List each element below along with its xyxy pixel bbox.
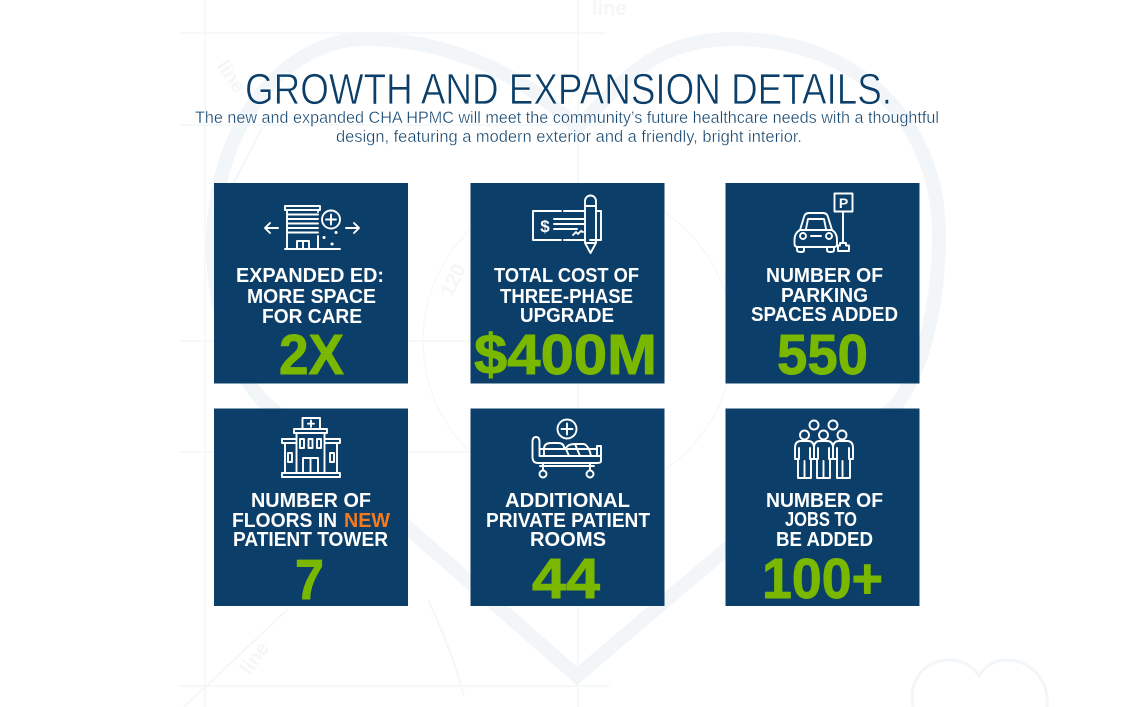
label: PATIENT TOWER [233, 528, 388, 551]
label: ADDITIONAL [505, 489, 630, 512]
icon: patient bed [532, 420, 601, 478]
label: EXPANDED ED: [236, 264, 384, 287]
label: MORE SPACE [247, 285, 376, 308]
subtitle: design, featuring a modern exterior and a friendly, bright interior. [336, 127, 802, 146]
panel: expanded ED [214, 183, 408, 387]
label: UPGRADE [520, 304, 614, 327]
value: 44 [532, 547, 600, 611]
panel: private patient rooms [470, 408, 664, 611]
value: $400M [474, 323, 657, 387]
label: ROOMS [530, 528, 606, 551]
panel: parking spaces [726, 183, 920, 387]
subtitle: The new and expanded CHA HPMC will meet the community’s future healthcare needs with a thoughtful [195, 108, 939, 127]
value: 7 [295, 548, 324, 612]
panel: jobs to be added [726, 408, 920, 611]
label: JOBS TO [785, 508, 857, 531]
label: NUMBER OF [766, 489, 883, 512]
label: SPACES ADDED [751, 303, 898, 326]
label [486, 489, 650, 551]
label [232, 489, 391, 551]
icon: check and pen: $ [540, 217, 550, 236]
subtitle [195, 108, 939, 146]
icon: expanded building [265, 206, 359, 249]
background watermark: heart and drafting lines: line [236, 638, 274, 679]
label: NUMBER OF [251, 489, 371, 512]
label: FOR CARE [262, 305, 362, 328]
label: NEW [344, 509, 391, 532]
background watermark: heart and drafting lines: 120 [437, 261, 471, 300]
label [766, 489, 883, 551]
icon: car and parking sign [794, 194, 852, 252]
label: PRIVATE PATIENT [486, 509, 650, 532]
icon: check and pen [533, 196, 601, 253]
panel: floors in new tower [214, 408, 408, 612]
value: 2X [279, 323, 344, 387]
label: NUMBER OF [766, 264, 883, 287]
icon: group of people [795, 420, 853, 478]
icon: hospital [282, 418, 340, 477]
value: 100+ [762, 547, 883, 611]
title: GROWTH AND EXPANSION DETAILS. [245, 65, 892, 114]
value: 550 [777, 323, 868, 387]
label [494, 264, 639, 327]
background watermark: heart and drafting lines: line [212, 56, 250, 97]
label [751, 264, 898, 326]
background watermark: heart and drafting lines [180, 0, 1047, 707]
label: BE ADDED [776, 528, 873, 551]
label: TOTAL COST OF [494, 264, 639, 287]
label: THREE-PHASE [500, 285, 633, 308]
label [236, 264, 384, 328]
label: PARKING [781, 284, 868, 307]
label: FLOORS IN [232, 509, 337, 532]
panel: total cost [470, 183, 664, 387]
icon: car and parking sign: P [839, 195, 848, 211]
